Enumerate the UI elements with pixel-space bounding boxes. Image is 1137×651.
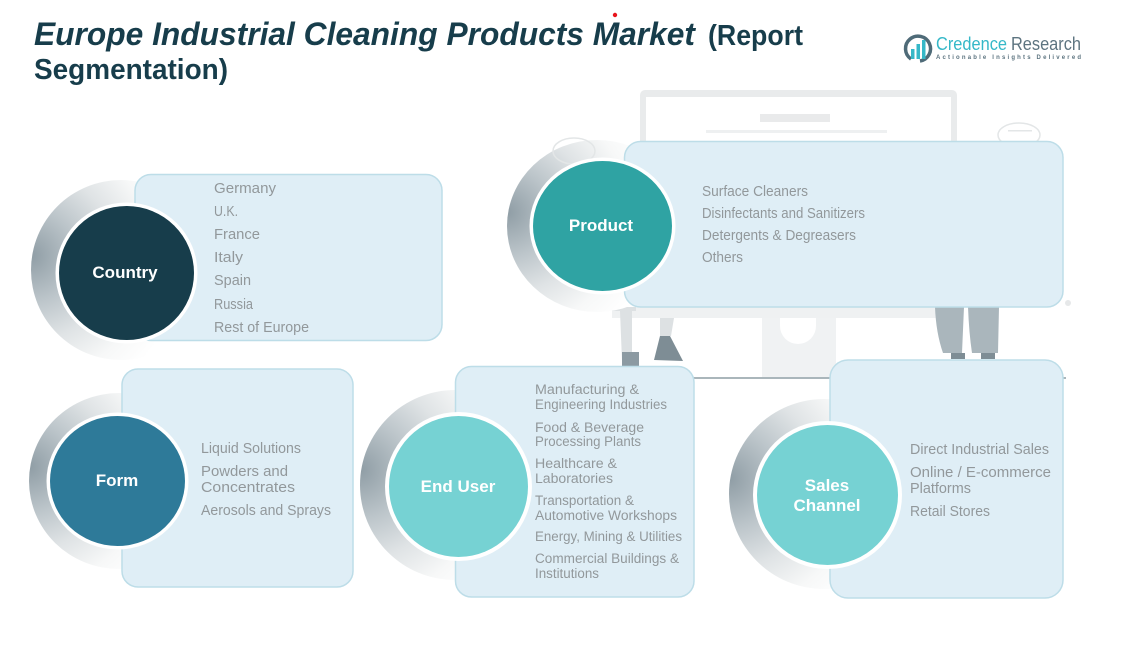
circle: Country: Country (92, 263, 158, 282)
panel: Sales Channel (830, 360, 1063, 598)
title: Segmentation) (34, 54, 228, 86)
list: Country items: U.K. (214, 204, 238, 220)
list: End User items (535, 382, 682, 581)
segment: Sales Channel (729, 360, 1063, 598)
list: End User items: Processing Plants (535, 434, 641, 449)
list: End User items: Healthcare & (535, 456, 617, 471)
list: Product items: Disinfectants and Sanitizers (702, 206, 865, 222)
red dot (613, 13, 617, 17)
list: End User items: Engineering Industries (535, 397, 667, 412)
segment: Product (507, 138, 1063, 312)
circle: Sales Channel: Channel (793, 496, 861, 515)
list: Form items: Liquid Solutions (201, 441, 301, 457)
list: Form items: Aerosols and Sprays (201, 503, 331, 519)
circle: Sales Channel (753, 421, 902, 569)
list: Country items: France (214, 227, 260, 243)
list: End User items: Manufacturing & (535, 382, 639, 397)
list: End User items: Laboratories (535, 471, 613, 486)
list: End User items: Automotive Workshops (535, 508, 677, 523)
list: End User items: Institutions (535, 566, 599, 581)
list: Sales Channel items: Online / E-commerce (910, 465, 1051, 481)
circle: Form (46, 412, 188, 550)
crescent (360, 390, 550, 580)
list: End User items: Food & Beverage (535, 420, 644, 435)
logo: Credence Research: Research (1011, 34, 1081, 54)
circle: Product (530, 158, 676, 294)
panel: Form (122, 369, 353, 587)
speech bubble right (998, 123, 1040, 147)
list: Country items: Italy (214, 250, 244, 266)
crescent (507, 140, 687, 312)
circle: Form: Form (96, 471, 138, 490)
circle: End User (385, 412, 532, 561)
list: Product items: Others (702, 250, 743, 266)
list: Product items: Detergents & Degreasers (702, 228, 856, 244)
ground line (640, 377, 1066, 379)
list: Sales Channel items: Direct Industrial Sales (910, 442, 1049, 458)
title: (Report (708, 20, 803, 52)
list: Country items (214, 181, 309, 336)
list: Country items: Rest of Europe (214, 320, 309, 336)
circle: End User: End User (421, 477, 496, 496)
crescent (29, 393, 209, 569)
circle: Country (56, 202, 198, 344)
list: Sales Channel items: Platforms (910, 481, 971, 497)
panel: Product (624, 142, 1063, 307)
crescent (729, 399, 919, 589)
list: End User items: Energy, Mining & Utilities (535, 529, 682, 544)
left figure legs (612, 307, 636, 361)
segment: End User (360, 366, 694, 597)
circle: Product: Product (569, 216, 633, 235)
list: Form items (201, 441, 331, 519)
background illustration: monitor and figures (612, 90, 1071, 379)
list: End User items: Transportation & (535, 493, 634, 508)
speech bubble left (553, 138, 595, 164)
panel: End User (456, 366, 694, 597)
logo: Credence Research: Credence (936, 34, 1007, 54)
list: Country items: Russia (214, 297, 254, 313)
title (34, 16, 803, 86)
logo: Credence Research (906, 34, 1081, 61)
list: Form items: Powders and (201, 464, 288, 480)
right figure legs (935, 307, 999, 353)
list: Country items: Germany (214, 181, 277, 197)
monitor frame (640, 90, 957, 318)
circle: Sales Channel: Sales (805, 476, 849, 495)
list: Form items: Concentrates (201, 480, 295, 496)
panel: Country (135, 174, 442, 340)
segment: Form (29, 369, 353, 587)
list: Sales Channel items: Retail Stores (910, 504, 990, 520)
crescent (31, 180, 211, 360)
segment: Country (31, 174, 442, 360)
list: Product items (702, 184, 865, 266)
list: End User items: Commercial Buildings & (535, 551, 679, 566)
title: Europe Industrial Cleaning Products Market (34, 16, 696, 52)
list: Product items: Surface Cleaners (702, 184, 808, 200)
monitor stand (762, 318, 836, 378)
list: Sales Channel items (910, 442, 1051, 520)
list: Country items: Spain (214, 273, 251, 289)
logo: Credence Research: Actionable Insights Delivered (936, 55, 1081, 61)
logo icon (906, 36, 931, 61)
